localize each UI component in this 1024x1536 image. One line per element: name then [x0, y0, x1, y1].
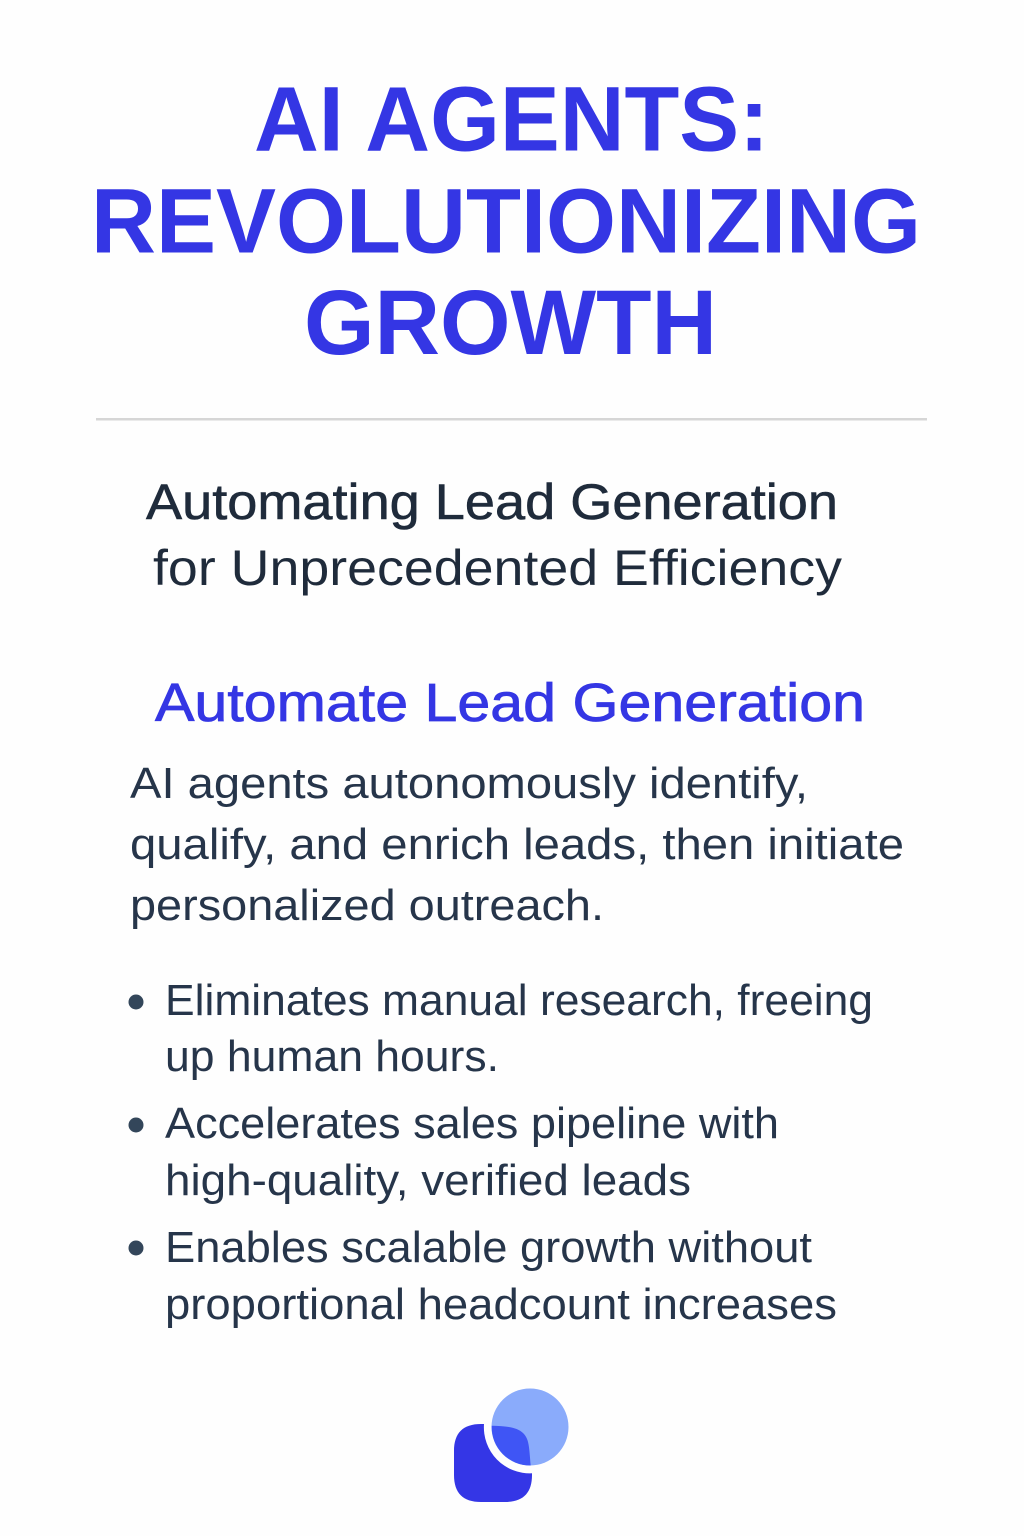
benefits list: [128, 976, 873, 1329]
title: GROWTH: [304, 272, 717, 374]
bullet: eliminates manual research: [128, 976, 873, 1081]
bullet: accelerates sales pipeline: high-quality, verified leads: [165, 1156, 691, 1205]
icon: overlapping logo mark: [454, 1388, 568, 1502]
intro paragraph: qualify, and enrich leads, then initiate: [130, 820, 904, 869]
intro paragraph: [130, 759, 904, 930]
subtitle: for Unprecedented Efficiency: [153, 540, 842, 596]
intro paragraph: AI agents autonomously identify,: [130, 759, 808, 808]
title: [91, 68, 921, 374]
bullet: accelerates sales pipeline: Accelerates sales pipeline with: [165, 1099, 779, 1148]
bullet: accelerates sales pipeline: [128, 1099, 779, 1205]
bullet: enables scalable growth: proportional headcount increases: [165, 1280, 837, 1329]
bullet: eliminates manual research: Eliminates manual research, freeing: [165, 976, 873, 1025]
title: AI AGENTS:: [254, 68, 769, 170]
bullet: enables scalable growth: [128, 1223, 837, 1329]
bullet: eliminates manual research: up human hours.: [165, 1032, 499, 1081]
subtitle: [146, 474, 842, 596]
section heading: Automate Lead Generation: [155, 673, 865, 733]
intro paragraph: personalized outreach.: [130, 881, 604, 930]
bullet: enables scalable growth: Enables scalable growth without: [165, 1223, 812, 1272]
subtitle: Automating Lead Generation: [146, 474, 838, 530]
title: REVOLUTIONIZING: [91, 170, 921, 272]
